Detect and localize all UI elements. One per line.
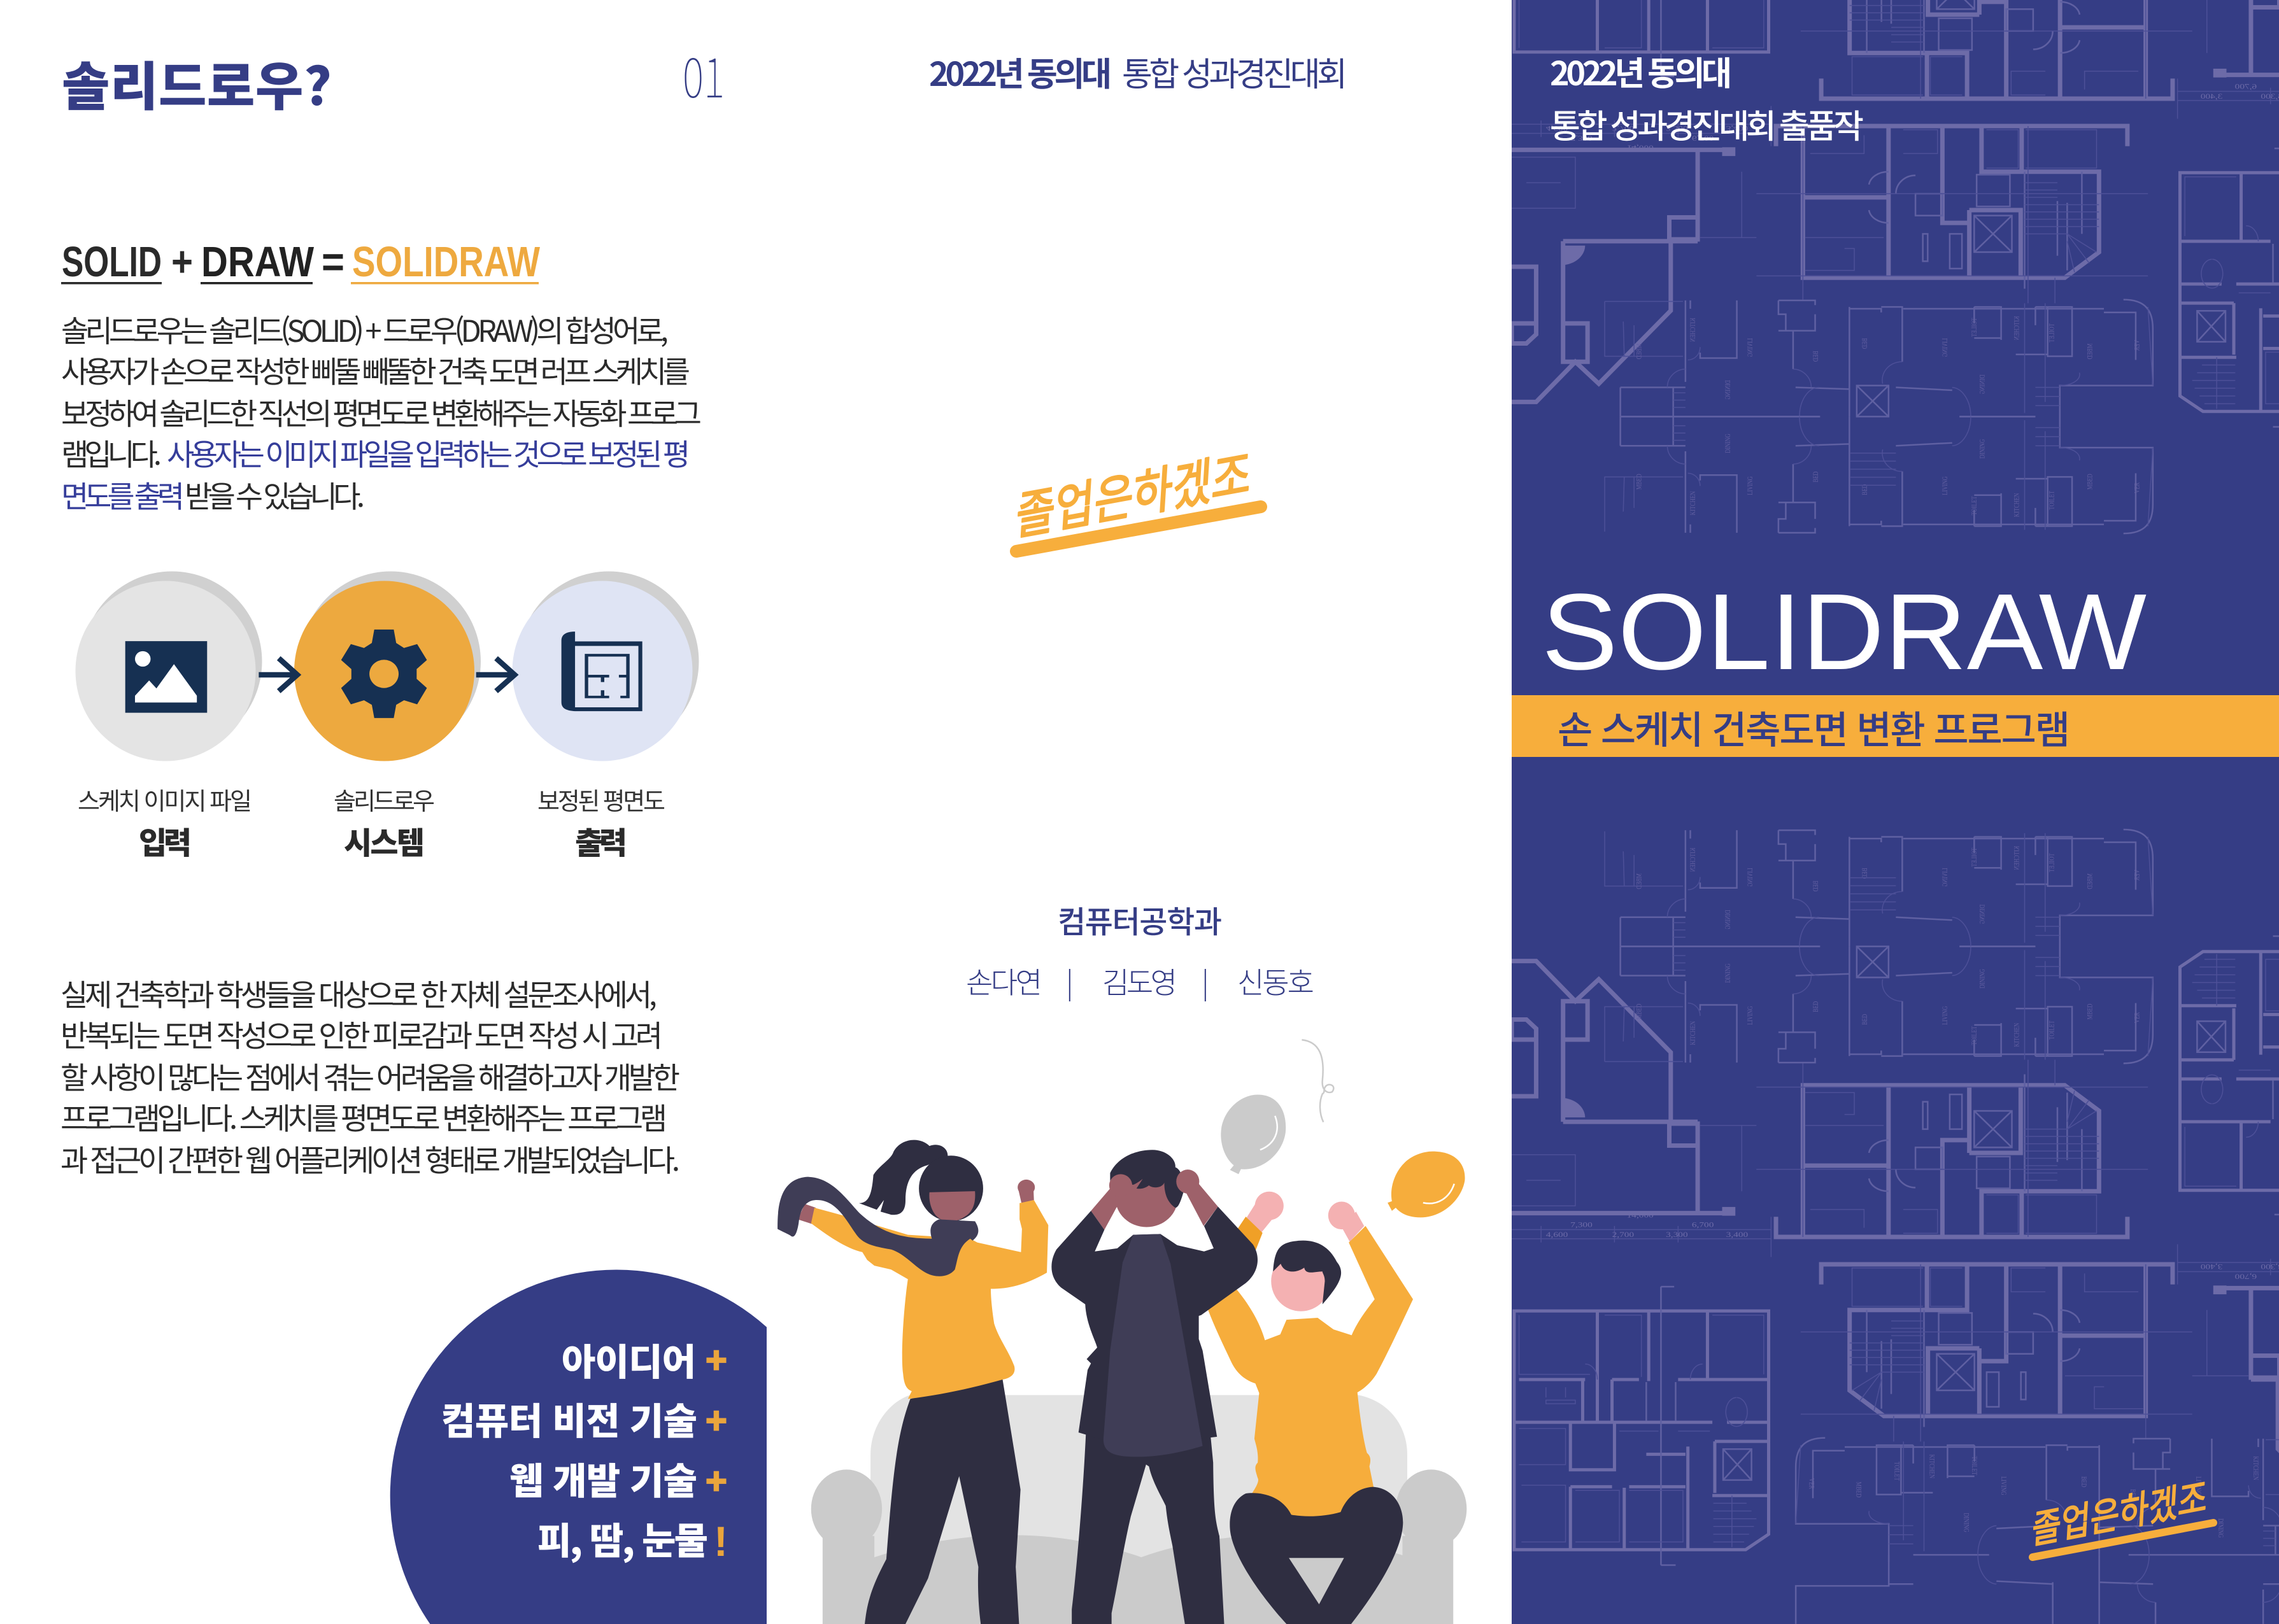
callout line: idea: 아이디어 <box>562 1332 696 1386</box>
subheading: formula: = <box>322 238 344 286</box>
page number: 01 <box>683 36 725 113</box>
text block: description: 사용자가 손으로 작성한 삐뚤 빼뚤한 건축 도면 러프 스케치를 <box>61 348 690 392</box>
heading: contest entry: 2022년 동의대 <box>1550 47 1732 95</box>
label: system: 솔리드로우 <box>334 782 435 817</box>
heading: what is solidraw: 솔리드로우? <box>62 45 332 120</box>
subheading: formula: SOLIDRAW <box>352 238 541 286</box>
label: output: 보정된 평면도 <box>537 782 665 817</box>
text block: description: 램입니다. <box>61 430 162 474</box>
label: input: 스케치 이미지 파일 <box>78 782 252 817</box>
icon: gear <box>341 630 427 718</box>
team members: | <box>1202 960 1209 1002</box>
step: output circle <box>512 572 699 761</box>
subtitle band <box>1512 695 2279 757</box>
subtitle band: 손 스케치 건축도면 변환 프로그램 <box>1558 700 2070 755</box>
text block: motivation: 과 접근이 간편한 웹 어플리케이션 형태로 개발되었습니다. <box>60 1136 680 1180</box>
subheading: formula: + <box>171 238 193 286</box>
cover title: SOLIDRAW <box>1542 572 2147 693</box>
team members: | <box>1066 960 1074 1002</box>
team logo: 졸업은하겠조 <box>1014 432 1254 549</box>
label: system <box>334 782 435 863</box>
text block: description: 면도를 출력 <box>61 472 185 516</box>
step: system circle <box>294 572 481 761</box>
subheading: formula <box>61 238 541 286</box>
text block: description <box>61 307 702 516</box>
team logo: 졸업은하겠조 <box>2031 1467 2209 1555</box>
balloon: gray <box>1221 1040 1333 1174</box>
flow diagram: input, system, output <box>75 572 699 863</box>
panel: about page (left) <box>60 36 767 1624</box>
callout line: idea: + <box>706 1339 727 1381</box>
callout line: blood sweat tears: 피, 땀, 눈물 <box>537 1511 708 1565</box>
department: 컴퓨터공학과 <box>1058 897 1222 942</box>
heading: contest name <box>929 48 1347 95</box>
person: right, upper body <box>1207 1192 1413 1520</box>
person: middle <box>1051 1150 1258 1624</box>
team members: 손다연 <box>966 960 1042 1002</box>
arrow: input to system <box>259 658 297 691</box>
text block: description: 사용자는 이미지 파일을 입력하는 것으로 보정된 평 <box>167 430 690 474</box>
text block: description: 보정하여 솔리드한 직선의 평면도로 변환해주는 자동화 프로그 <box>61 390 702 434</box>
heading: contest entry <box>1550 47 1864 148</box>
label: input <box>78 782 252 863</box>
heading: contest entry: 통합 성과경진대회 출품작 <box>1550 100 1864 148</box>
icon: floor plan <box>562 632 643 711</box>
balloon: orange <box>1388 1152 1465 1217</box>
subheading: formula: DRAW <box>201 238 315 286</box>
heading: contest name: 2022년 동의대 <box>929 48 1112 95</box>
blue circle <box>390 1270 767 1624</box>
callout: ingredients circle <box>390 1270 767 1624</box>
panel: credits page (centre) <box>777 48 1466 1624</box>
cover background <box>1512 0 2279 1624</box>
callout line: web dev: + <box>706 1460 727 1502</box>
callout line: computer vision: 컴퓨터 비전 기술 <box>441 1392 697 1445</box>
text block: motivation: 할 사항이 많다는 점에서 겪는 어려움을 해결하고자 개발한 <box>60 1054 680 1098</box>
callout line: blood sweat tears: ! <box>714 1518 728 1565</box>
text block: motivation <box>60 971 680 1180</box>
text block: description: 받을 수 있습니다. <box>185 472 365 516</box>
label: output <box>537 782 665 863</box>
subheading: formula: SOLID <box>62 238 162 286</box>
text block: motivation: 프로그램입니다. 스케치를 평면도로 변환해주는 프로그램 <box>60 1094 667 1138</box>
person: left <box>777 1140 1048 1624</box>
text block: motivation: 실제 건축학과 학생들을 대상으로 한 자체 설문조사에서, <box>60 971 657 1015</box>
team members <box>966 960 1314 1002</box>
text block: description: 솔리드로우는 솔리드(SOLID) + 드로우(DRAW)의 합성어로, <box>61 307 669 351</box>
label: system: 시스템 <box>344 818 425 863</box>
label: output: 출력 <box>575 818 627 863</box>
team members: 신동호 <box>1237 960 1314 1002</box>
arrow: system to output <box>476 658 515 691</box>
text block: motivation: 반복되는 도면 작성으로 인한 피로감과 도면 작성 시 고려 <box>60 1012 663 1056</box>
team members: 김도영 <box>1102 960 1177 1002</box>
callout line: computer vision: + <box>706 1400 727 1441</box>
illustration: celebrating students on sofa <box>777 1040 1466 1624</box>
heading: contest name: 통합 성과경진대회 <box>1122 48 1347 95</box>
label: input: 입력 <box>139 818 192 863</box>
callout line: web dev: 웹 개발 기술 <box>509 1451 697 1505</box>
icon: image file <box>125 641 207 713</box>
panel: cover page (right) <box>1512 0 2279 1624</box>
sofa <box>811 1395 1466 1624</box>
blueprint pattern <box>1512 0 2279 1624</box>
person: right, legs <box>1230 1487 1403 1624</box>
step: input circle <box>75 572 262 761</box>
